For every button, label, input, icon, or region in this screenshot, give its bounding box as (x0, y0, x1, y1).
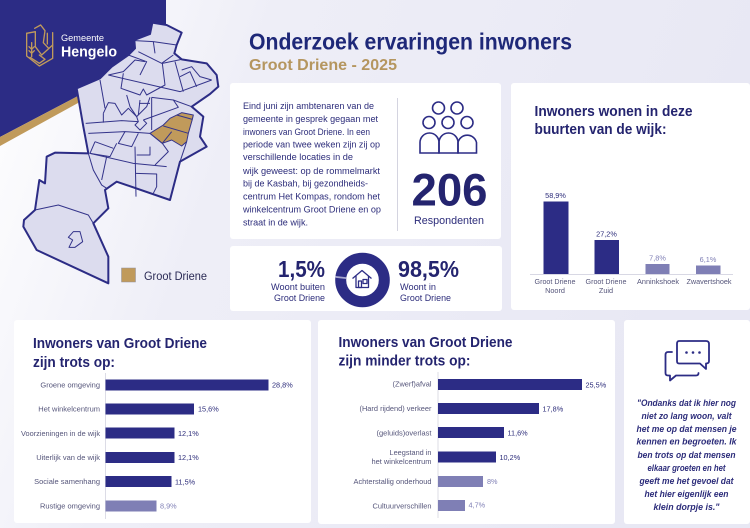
bar chart: 10,2% (500, 453, 521, 462)
column chart: 6,1% (700, 255, 717, 264)
bar chart: 4,7% (468, 500, 486, 510)
column chart: Groot Driene (586, 277, 626, 286)
header band (0, 0, 166, 146)
logo: Gemeente Hengelo: Gemeente (61, 33, 104, 44)
column chart: Zuid (599, 286, 613, 295)
quote text: niet zo lang woon, valt (642, 411, 732, 421)
bar chart: 17,8% (542, 404, 564, 414)
panel: share living in the district: Groot Driene (400, 293, 451, 304)
column chart: Groot Driene (534, 277, 576, 286)
bar chart: het winkelcentrum (372, 457, 432, 466)
bar chart: 15,6% (198, 404, 219, 414)
respondent count: 206 (412, 164, 488, 216)
quote text: klein dorpje is." (654, 502, 720, 512)
intro text: periode van twee weken zijn zij op (243, 140, 380, 150)
quote text: het hier eigenlijk een (644, 489, 729, 499)
bar chart: Rustige omgeving (40, 502, 100, 510)
intro text: inwoners van Groot Driene. In een (243, 127, 370, 137)
neighbourhood borders (35, 41, 212, 247)
panel: less proud of: zijn minder trots op: (338, 352, 470, 370)
bar chart: (Zwerf)afval (392, 380, 432, 388)
panel: neighbourhoods (511, 83, 750, 310)
map legend (122, 268, 207, 283)
quote text: het me op dat mensen je (636, 424, 736, 434)
logo: Gemeente Hengelo (27, 25, 117, 66)
intro text (242, 101, 381, 228)
highlighted district: Groot Driene (150, 113, 193, 146)
bar chart: Voorzieningen in de wijk (21, 429, 100, 438)
bar chart: Het winkelcentrum (38, 404, 100, 414)
panel: introduction and respondents (230, 83, 501, 239)
bar chart: 11,6% (508, 428, 528, 438)
quote text: ben trots op dat mensen (638, 450, 736, 460)
intro text: bij de Kasbah, bij gezondheids- (243, 178, 368, 188)
bar chart: Leegstand in (390, 448, 432, 457)
subtitle: Groot Driene - 2025 (249, 57, 397, 74)
column chart: 27,2% (596, 230, 617, 238)
bar chart: (Hard rijdend) verkeer (360, 404, 432, 413)
map of Hengelo (23, 23, 218, 283)
intro text: Eind juni zijn ambtenaren van de (243, 101, 374, 111)
bar chart: Achterstallig onderhoud (354, 477, 432, 486)
quote text: kennen en begroeten. Ik (636, 436, 737, 446)
bar chart (354, 372, 607, 518)
bar chart: Uiterlijk van de wijk (36, 453, 100, 462)
panel: quote (624, 320, 750, 524)
heading: Inwoners van Groot Driene (33, 335, 207, 352)
bar chart: Cultuurverschillen (372, 502, 432, 510)
icon: house (352, 270, 372, 288)
panel: neighbourhoods: buurten van de wijk: (534, 121, 666, 138)
quote text: geeft me het gevoel dat (639, 476, 734, 486)
stat: outside: 1,5% (278, 256, 325, 282)
column chart: Zwavertshoek (686, 277, 732, 286)
bar chart (21, 373, 293, 519)
map legend: Groot Driene (144, 271, 207, 283)
donut chart (341, 258, 384, 302)
panel: proud of (14, 320, 311, 523)
title (249, 28, 572, 74)
bar chart: 28,8% (272, 380, 293, 390)
logo mark (27, 25, 53, 66)
bar chart: Sociale samenhang (34, 477, 100, 486)
intro text: wijk geweest: op de rommelmarkt (242, 166, 381, 176)
panel: share living in the district: Groot Driene (274, 293, 325, 304)
intro text: verschillende locaties in de (243, 152, 353, 162)
bar chart: 25,5% (586, 380, 607, 390)
logo: Gemeente Hengelo: Hengelo (61, 44, 117, 60)
bar chart: 8% (487, 477, 498, 486)
bar chart: 12,1% (178, 429, 199, 438)
heading: Inwoners wonen in deze (534, 103, 692, 120)
intro text: straat in de wijk. (243, 218, 308, 228)
quote text (636, 398, 737, 512)
intro text: centrum Het Kompas, rondom het (243, 192, 381, 202)
panel: introduction and respondents: Respondenten (414, 215, 484, 227)
column chart: 58,9% (545, 191, 566, 200)
bar chart: (geluids)overlast (376, 428, 432, 438)
bar chart: 12,1% (178, 453, 199, 462)
intro text: gemeente in gesprek gegaan met (243, 114, 378, 124)
column chart (530, 191, 733, 295)
stat: inside: 98,5% (398, 256, 459, 282)
column chart: Anninkshoek (637, 277, 679, 286)
heading: Inwoners van Groot Driene (338, 334, 512, 351)
quote text: elkaar groeten en het (648, 463, 726, 473)
intro text: winkelcentrum Groot Driene en op (242, 204, 381, 214)
quote text: "Ondanks dat ik hier nog (637, 398, 736, 408)
column chart: 7,8% (649, 254, 666, 262)
bar chart: 11,5% (175, 478, 196, 486)
panel: share living in the district: Woont in (400, 282, 436, 293)
icon: speech bubbles (666, 341, 709, 380)
panel: share living in the district (230, 246, 502, 311)
icon: group of people (420, 102, 476, 153)
panel: proud of: zijn trots op: (33, 354, 115, 371)
panel: less proud of (318, 320, 615, 524)
panel: share living in the district: Woont buiten (271, 282, 325, 293)
column chart: Noord (545, 286, 565, 295)
title: Onderzoek ervaringen inwoners (249, 28, 572, 54)
bar chart: 8,9% (160, 502, 177, 510)
bar chart: Groene omgeving (40, 380, 100, 390)
